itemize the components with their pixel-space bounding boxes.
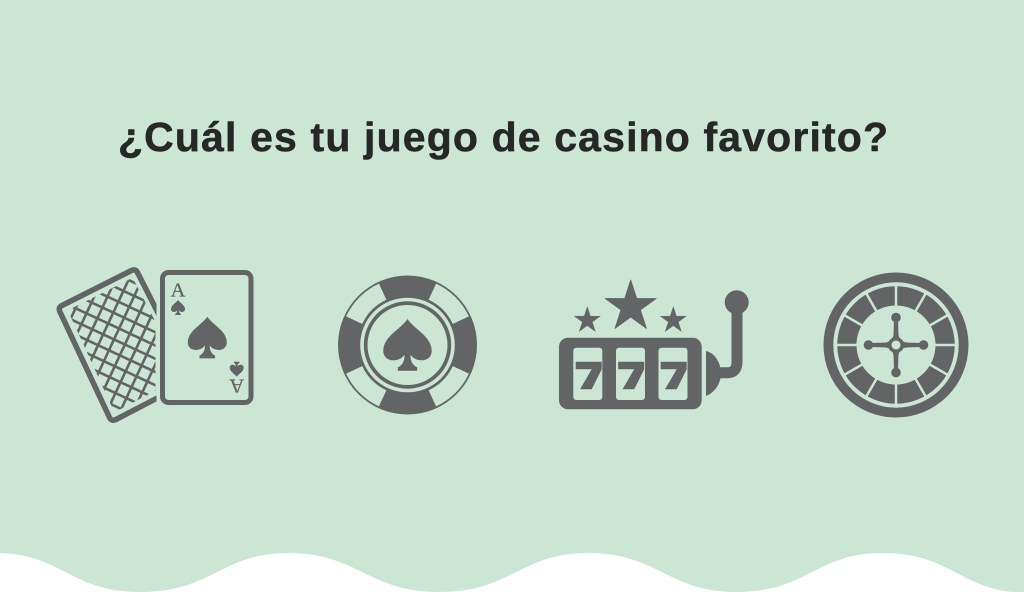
- lever: [706, 290, 749, 396]
- sevens: [576, 362, 687, 389]
- stars: [574, 280, 686, 331]
- icon: slot machine: [559, 280, 749, 409]
- card letter top: A: [171, 280, 186, 302]
- wheel dividers: [836, 285, 956, 405]
- small spade top: [171, 300, 185, 315]
- front ace card: [162, 272, 251, 402]
- light chip segments: [346, 284, 469, 406]
- large spade: [188, 317, 227, 358]
- title: ¿Cuál es tu juego de casino favorito?: [118, 114, 888, 160]
- icon: roulette wheel: [824, 272, 968, 418]
- icon: playing cards: [56, 267, 254, 423]
- back card with lattice: [56, 267, 156, 423]
- card letter bottom: A: [229, 374, 244, 396]
- chip spade: [383, 319, 432, 371]
- white wave footer: [0, 553, 1024, 604]
- machine body: [559, 338, 702, 409]
- small spade bottom: [230, 362, 244, 377]
- reels: [573, 348, 688, 400]
- icon: poker chip: [338, 276, 477, 414]
- wheel cross: [864, 313, 928, 377]
